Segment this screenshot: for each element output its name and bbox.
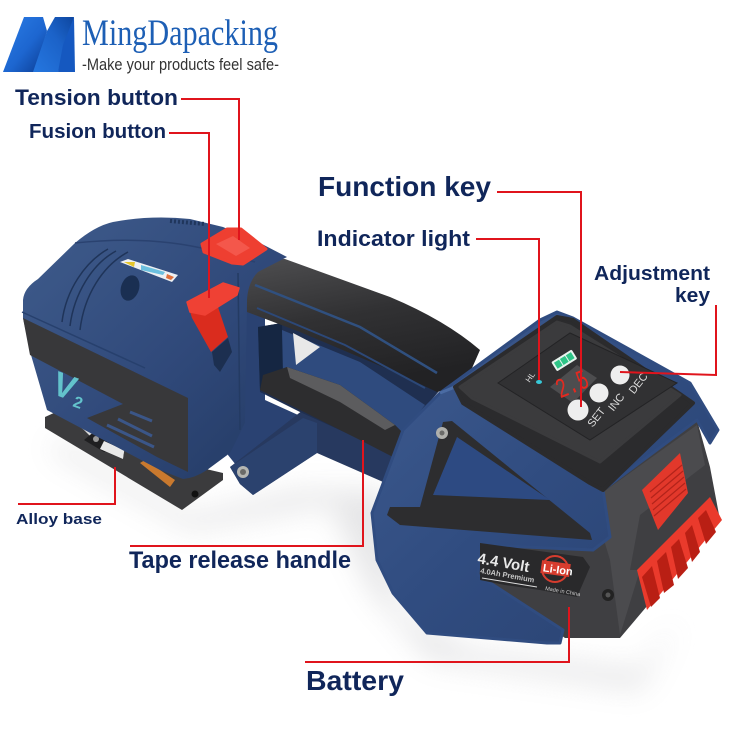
lower grip: tape release handle xyxy=(260,367,403,457)
battery label plate: 4.4 Volt xyxy=(476,550,531,576)
DEC key xyxy=(610,366,651,396)
label: Battery xyxy=(305,607,569,696)
side slats xyxy=(107,412,154,447)
label: Indicator light: Indicator light xyxy=(317,226,471,251)
indicator LED xyxy=(536,380,542,384)
rear neck xyxy=(228,270,318,470)
front screw xyxy=(436,427,448,439)
label: Tape release handle xyxy=(129,440,363,574)
label: Tape release handle: Tape release handle xyxy=(129,547,351,574)
battery label plate xyxy=(476,543,590,598)
label: Fusion button xyxy=(29,121,209,298)
battery label plate: Li-Ion xyxy=(542,562,574,578)
SET key: SET xyxy=(585,405,608,430)
INC key: INC xyxy=(606,391,627,414)
inner blue bar xyxy=(282,330,425,433)
battery red foot xyxy=(637,497,722,610)
battery level icon xyxy=(551,349,577,371)
rear foot xyxy=(230,418,317,495)
tension button xyxy=(202,229,266,264)
warning sticker xyxy=(120,259,178,282)
white handle label xyxy=(293,333,320,365)
digital display: 2.5 xyxy=(552,366,594,407)
V2 mark: 2 xyxy=(71,394,85,413)
battery red latch xyxy=(642,453,688,530)
DEC key: DEC xyxy=(627,371,651,396)
logo mark xyxy=(3,17,75,72)
label: Tension button xyxy=(15,85,239,240)
rear support under grip xyxy=(230,410,395,495)
INC key xyxy=(590,384,627,414)
battery label plate: Made in China xyxy=(545,586,582,598)
SET key xyxy=(568,400,608,430)
upper grip xyxy=(247,259,480,392)
label: Function key xyxy=(318,171,581,407)
label: Tension button: Tension button xyxy=(15,85,178,110)
label: Adjustment key: Adjustment xyxy=(594,263,710,285)
front head shell xyxy=(372,312,718,643)
alloy base xyxy=(45,412,223,510)
battery label plate: 4.0Ah Premium xyxy=(480,566,535,585)
fusion button xyxy=(187,283,239,372)
control panel cover xyxy=(455,317,693,490)
logo tagline: -Make your products feel safe- xyxy=(82,55,279,74)
machine illustration xyxy=(22,218,722,690)
trim inner triangle xyxy=(433,437,550,500)
vent ridges xyxy=(22,249,145,368)
HL text: HL xyxy=(524,370,537,384)
side hole xyxy=(117,273,143,303)
label: Alloy base: Alloy base xyxy=(16,511,102,528)
label: Alloy base xyxy=(16,467,115,528)
label: Fusion button: Fusion button xyxy=(29,121,166,143)
label: Battery: Battery xyxy=(306,665,404,696)
battery pack xyxy=(478,420,722,638)
label: Function key: Function key xyxy=(318,171,491,202)
label: Indicator light xyxy=(317,226,539,380)
backing between handle bars xyxy=(258,320,440,455)
V2 mark: V xyxy=(47,365,82,408)
window opening xyxy=(258,323,283,390)
digital display xyxy=(550,365,597,407)
top vents xyxy=(170,221,205,224)
logo wordmark: MingDapacking xyxy=(82,13,278,54)
label: Adjustment key xyxy=(594,263,716,375)
label: Adjustment key: key xyxy=(675,285,711,307)
ground shadow xyxy=(50,440,680,690)
dark side band xyxy=(23,318,188,472)
dark trim frame xyxy=(387,421,592,540)
rear head body xyxy=(23,218,287,479)
